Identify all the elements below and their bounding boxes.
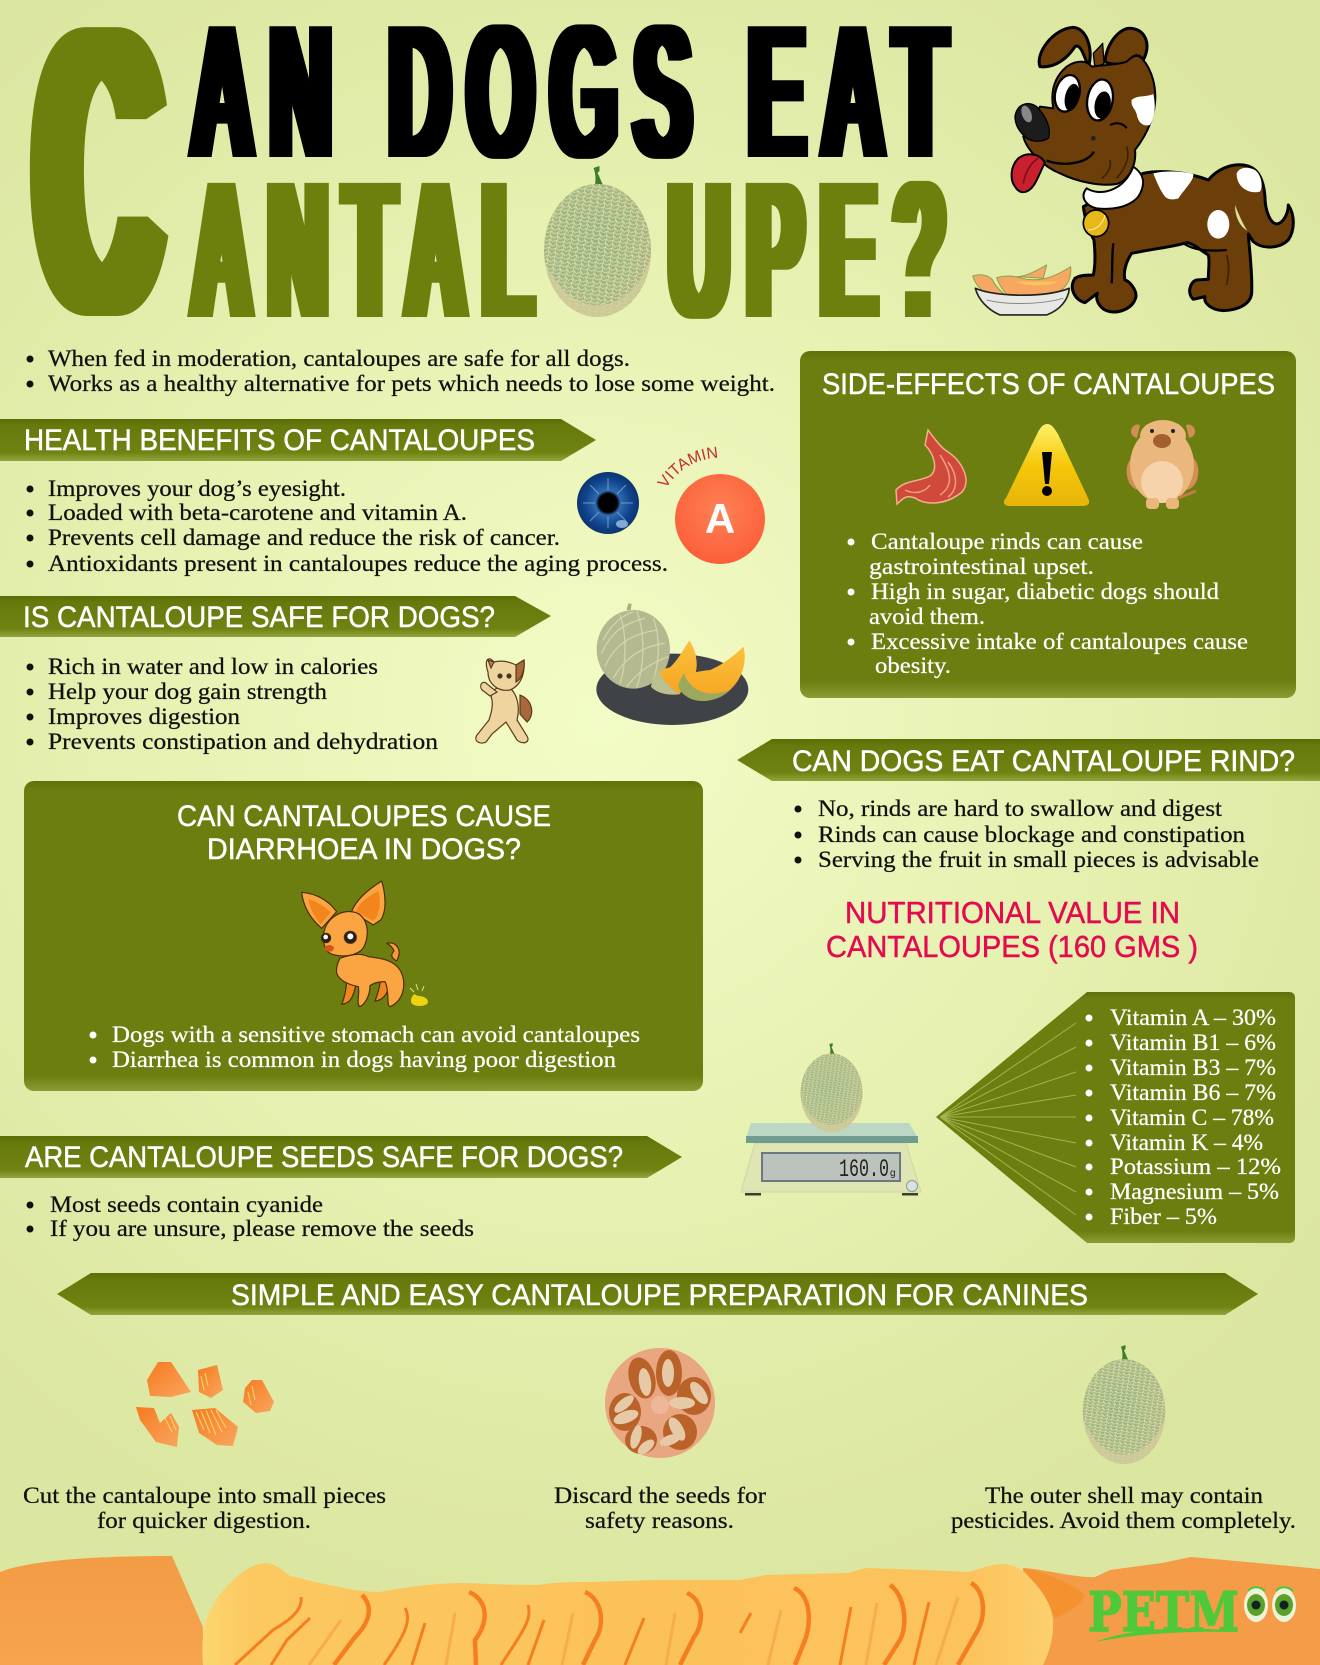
- caption: seeds: [554, 1483, 766, 1533]
- bowl: [975, 288, 1069, 315]
- heading: nutritional value: CANTALOUPES (160 GMS ): [826, 929, 1198, 964]
- side effects list: gastrointestinal upset.: [869, 554, 1094, 579]
- collar: [1084, 167, 1143, 209]
- panel: nutrition arrow: [936, 992, 1295, 1243]
- scale body: [741, 1143, 921, 1192]
- nutrient list: Potassium – 12%: [1110, 1154, 1281, 1179]
- safety list: Prevents constipation and dehydration: [48, 729, 439, 754]
- logo: Petmoo: PETM: [1088, 1580, 1239, 1644]
- intro bullet list: [26, 346, 775, 396]
- seeds list: If you are unsure, please remove the seeds: [50, 1216, 474, 1241]
- seeds list: Most seeds contain cyanide: [50, 1192, 323, 1217]
- icon: small standing dog: [476, 659, 532, 743]
- icon: chihuahua: [302, 881, 404, 1007]
- banner: is cantaloupe safe: IS CANTALOUPE SAFE FOR DOGS?: [23, 601, 495, 634]
- banner: preparation: [57, 1273, 1258, 1315]
- health benefits list: Improves your dog’s eyesight.: [48, 476, 346, 501]
- icon: cantaloupe as letter O: [544, 166, 651, 317]
- ray lines: [940, 1023, 1076, 1215]
- ears: [1039, 27, 1090, 67]
- panel: diarrhoea: [24, 781, 703, 1091]
- caption: cut: for quicker digestion.: [97, 1508, 311, 1533]
- nutrient list: Magnesium – 5%: [1110, 1179, 1279, 1204]
- panel: side effects: SIDE-EFFECTS OF CANTALOUPES: [822, 368, 1275, 401]
- caption: cut: Cut the cantaloupe into small pieces: [23, 1483, 386, 1508]
- icon: fat dog: [1127, 420, 1198, 509]
- safety list: Help your dog gain strength: [48, 679, 328, 704]
- health benefits list: [26, 476, 668, 576]
- panel heading: CAN CANTALOUPES CAUSE: [177, 800, 551, 833]
- scale display: [762, 1153, 900, 1181]
- banner: preparation: SIMPLE AND EASY CANTALOUPE PREPARATION FOR CANINES: [231, 1279, 1088, 1312]
- melon: [801, 1043, 862, 1132]
- health benefits list: Prevents cell damage and reduce the risk of cancer.: [48, 525, 560, 550]
- side effects list: avoid them.: [869, 604, 985, 629]
- title: Can Dogs Eat Cantaloupe: [38, 0, 963, 399]
- illustration: melon on kitchen scale: g: [890, 1168, 896, 1179]
- panel heading: DIARRHOEA IN DOGS?: [207, 833, 521, 866]
- banner: can dogs eat rind: CAN DOGS EAT CANTALOUPE RIND?: [792, 745, 1295, 778]
- panel: side effects: [800, 351, 1296, 698]
- rind list: [794, 796, 1259, 872]
- intro bullet list: Works as a healthy alternative for pets which needs to lose some weight.: [48, 371, 775, 396]
- rind list: Serving the fruit in small pieces is advisable: [818, 847, 1259, 872]
- mouth: [1047, 152, 1094, 164]
- panel heading: [177, 800, 551, 866]
- side effects list: Cantaloupe rinds can cause: [871, 529, 1143, 554]
- safety list: Rich in water and low in calories: [48, 654, 378, 679]
- face white patch: [1132, 94, 1155, 125]
- nutrient list: [1086, 1005, 1281, 1229]
- icon: stomach: [896, 430, 966, 504]
- health benefits list: Antioxidants present in cantaloupes reduce the aging process.: [48, 551, 668, 576]
- illustration: cartoon dog with bowl: [973, 27, 1293, 315]
- caption: shell: [951, 1483, 1296, 1533]
- icon: yellow droppings: [410, 984, 428, 1006]
- illustration: melon on kitchen scale: [741, 1043, 921, 1196]
- white spots: [1153, 171, 1193, 199]
- side effects list: High in sugar, diabetic dogs should: [871, 579, 1220, 604]
- banner: seeds: ARE CANTALOUPE SEEDS SAFE FOR DOGS?: [25, 1141, 623, 1174]
- head: [1023, 56, 1155, 185]
- nutrient list: Fiber – 5%: [1110, 1204, 1217, 1229]
- nutrient list: Vitamin B3 – 7%: [1110, 1055, 1276, 1080]
- health benefits list: Loaded with beta-carotene and vitamin A.: [48, 500, 467, 525]
- nutrient list: Vitamin B6 – 7%: [1110, 1080, 1276, 1105]
- diarrhoea list: Dogs with a sensitive stomach can avoid cantaloupes: [112, 1022, 640, 1047]
- nose: [1015, 104, 1049, 141]
- diarrhoea list: [90, 1022, 640, 1072]
- bowl slices: [1017, 265, 1047, 278]
- icon: vitamin A: [656, 446, 765, 564]
- icon: whole cantaloupe: [1083, 1345, 1165, 1464]
- icon: blue eye: [577, 472, 639, 534]
- nutrient list: Vitamin C – 78%: [1110, 1105, 1274, 1130]
- safety list: [26, 654, 439, 754]
- nutrient list: Vitamin K – 4%: [1110, 1130, 1263, 1155]
- icon: cantaloupe seed cross-section: [605, 1348, 715, 1458]
- side effects list: [848, 529, 1248, 678]
- heading: nutritional value: NUTRITIONAL VALUE IN: [845, 895, 1180, 930]
- tongue: [1012, 154, 1045, 192]
- vitamin arc label: VITAMIN: [656, 446, 718, 486]
- rind list: No, rinds are hard to swallow and digest: [818, 796, 1223, 821]
- illustration: melon on kitchen scale: 160.0: [839, 1155, 889, 1184]
- icon: warning triangle: [1004, 424, 1089, 506]
- safety list: Improves digestion: [48, 704, 241, 729]
- diarrhoea list: Diarrhea is common in dogs having poor digestion: [112, 1047, 617, 1072]
- nutrient list: Vitamin B1 – 6%: [1110, 1030, 1276, 1055]
- scale platform: [746, 1123, 918, 1143]
- eyes: [1051, 72, 1084, 114]
- image: cantaloupe on slate plate: [596, 603, 748, 725]
- seeds list: [26, 1192, 474, 1241]
- icon: cut cantaloupe pieces: [136, 1362, 274, 1447]
- brow and nose-side lines: [1110, 123, 1127, 128]
- caption: shell: The outer shell may contain: [985, 1483, 1264, 1508]
- neck fur lines: [1102, 147, 1128, 178]
- caption: seeds: Discard the seeds for: [554, 1483, 766, 1508]
- heading: nutritional value: [826, 895, 1198, 964]
- body, tail and legs: [1072, 165, 1293, 312]
- intro bullet list: When fed in moderation, cantaloupes are safe for all dogs.: [48, 346, 630, 371]
- icon: vitamin A: A: [705, 495, 735, 542]
- footer: cantaloupe slices: [0, 1556, 1320, 1665]
- caption: cut: [23, 1483, 386, 1533]
- nutrient list: Vitamin A – 30%: [1110, 1005, 1276, 1030]
- tag: [1083, 210, 1109, 237]
- rind list: Rinds can cause blockage and constipation: [818, 822, 1246, 847]
- banner: health benefits: HEALTH BENEFITS OF CANTALOUPES: [24, 424, 535, 457]
- caption: shell: pesticides. Avoid them completely.: [951, 1508, 1296, 1533]
- caption: seeds: safety reasons.: [585, 1508, 734, 1533]
- side effects list: Excessive intake of cantaloupes cause: [871, 629, 1248, 654]
- side effects list: obesity.: [875, 653, 951, 678]
- title: Can Dogs Eat Cantaloupe: ANTAL: [192, 141, 550, 359]
